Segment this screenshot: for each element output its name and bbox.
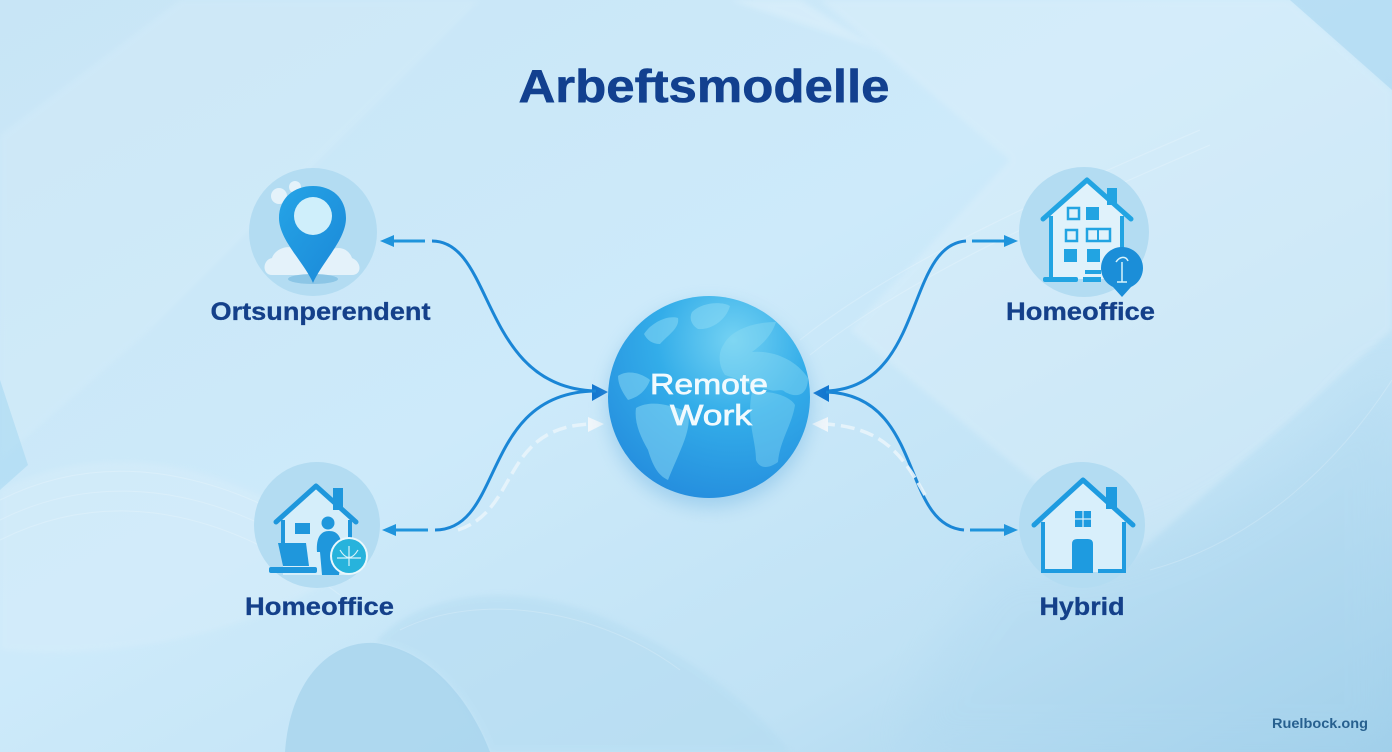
node: Hybrid — [1019, 462, 1145, 621]
globe: Remote Work: Work — [670, 400, 753, 432]
title: Arbeftsmodelle — [518, 60, 890, 112]
arrow: globe to Ortsunperendent — [380, 235, 608, 401]
icon: house with person and laptop — [254, 462, 380, 588]
label: Ortsunperendent — [210, 298, 431, 326]
label: Homeoffice — [1006, 298, 1155, 326]
node: Ortsunperendent — [210, 168, 431, 326]
icon: house — [1019, 462, 1145, 588]
icon: location pin with clouds — [249, 168, 377, 296]
arrow: globe to Homeoffice left — [382, 391, 596, 536]
arrow: globe to Hybrid — [826, 392, 1018, 536]
globe: Remote Work — [607, 296, 811, 507]
watermark: Ruelbock.ong — [1272, 716, 1368, 731]
label: Hybrid — [1040, 593, 1124, 621]
label: Homeoffice — [245, 593, 394, 621]
arrow: dashed white right — [812, 417, 925, 495]
globe continents — [618, 303, 808, 480]
node: Homeoffice left — [245, 462, 394, 621]
icon: multi-storey building with pin — [1019, 167, 1149, 297]
arrow: dashed white left — [458, 417, 604, 530]
node: Homeoffice right — [1006, 167, 1155, 326]
arrow: globe to Homeoffice right — [813, 235, 1018, 402]
globe label: Remote — [650, 369, 768, 401]
